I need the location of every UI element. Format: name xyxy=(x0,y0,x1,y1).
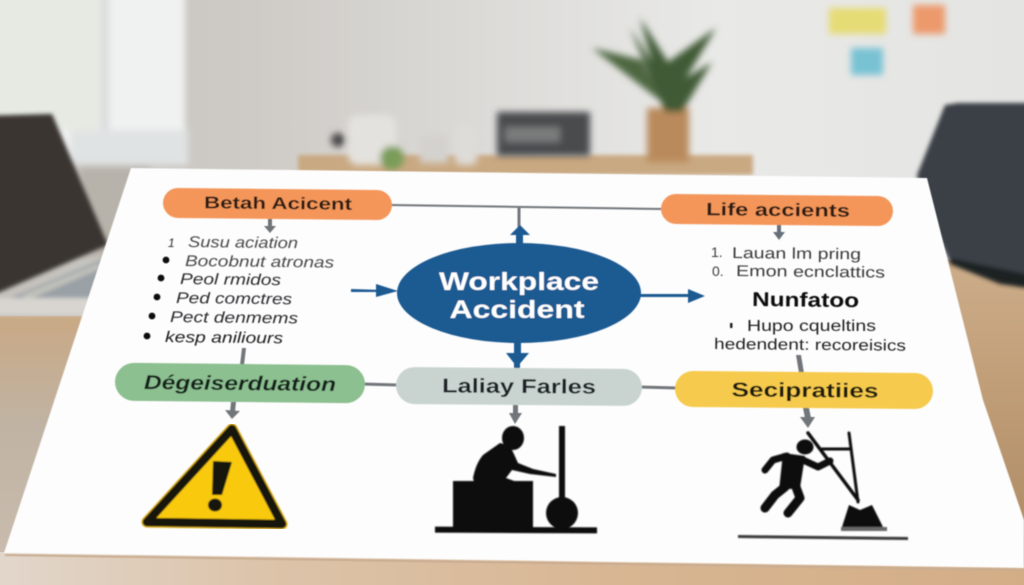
pill: Betah Acicent xyxy=(163,188,392,220)
icon: person falling from ladder xyxy=(738,433,908,540)
left list: Bocobnut atronas xyxy=(185,253,334,272)
paper sheet xyxy=(4,168,1024,571)
right list: Hupo cqueltins xyxy=(747,318,876,335)
arrow: right from ellipse xyxy=(640,289,705,303)
left list: kesp aniliours xyxy=(165,329,283,347)
pill: Dégeiserduation xyxy=(115,363,365,403)
connector: left list to green pill xyxy=(240,348,246,365)
right list: Emon ecnclattics xyxy=(736,263,885,282)
diagram content xyxy=(115,188,933,428)
arrow: top-left pill to list xyxy=(264,219,276,233)
potted plant xyxy=(592,18,716,162)
arrow: yellow pill to falling icon xyxy=(800,408,815,428)
pill: Secipratiies xyxy=(675,371,933,409)
arrow: top-right pill to list xyxy=(773,225,785,240)
central ellipse: Workplace Accident xyxy=(397,243,641,343)
wooden table xyxy=(0,255,1024,585)
connector: right list to yellow pill xyxy=(796,355,804,373)
central ellipse: Workplace Accident: Accident xyxy=(450,296,585,324)
right list: Nunfatoo xyxy=(752,289,859,312)
arrow: into ellipse from left xyxy=(351,284,398,297)
arrow: grey pill to worker icon xyxy=(509,405,522,424)
left list: Pect denmems xyxy=(170,309,298,327)
central ellipse: Workplace Accident: Workplace xyxy=(439,268,599,296)
pill: Laliay Farles: Laliay Farles xyxy=(442,375,596,399)
left list: Peol rmidos xyxy=(180,271,281,289)
arrow: up from ellipse xyxy=(510,225,530,246)
pill: Betah Acicent: Betah Acicent xyxy=(204,193,353,214)
back shelf xyxy=(298,155,753,175)
sticky notes xyxy=(829,5,945,75)
right list: 0. xyxy=(712,263,724,279)
right list: 1. xyxy=(711,244,723,260)
right list: hedendent: recoreisics xyxy=(714,336,906,355)
connector lines xyxy=(363,205,677,388)
pill: Secipratiies: Secipratiies xyxy=(731,379,879,403)
laptop xyxy=(0,114,108,315)
left list xyxy=(144,234,334,347)
icon: warning triangle xyxy=(147,429,282,524)
left list: Ped comctres xyxy=(176,290,292,308)
pill: Laliay Farles xyxy=(396,367,642,406)
pill: Dégeiserduation: Dégeiserduation xyxy=(144,372,336,396)
right list: Lauan lm pring xyxy=(732,245,861,263)
right list xyxy=(711,244,906,355)
pill: Life accients xyxy=(661,194,893,226)
pill: Life accients: Life accients xyxy=(706,199,850,221)
arrow: down from ellipse xyxy=(506,341,529,368)
arrow: green pill to warning sign xyxy=(225,402,240,419)
left list: Susu aciation xyxy=(188,234,298,252)
office chair xyxy=(917,103,1024,292)
left list: 1 xyxy=(168,236,175,250)
shelf objects xyxy=(331,112,590,170)
icon: worker at machine xyxy=(435,426,597,533)
